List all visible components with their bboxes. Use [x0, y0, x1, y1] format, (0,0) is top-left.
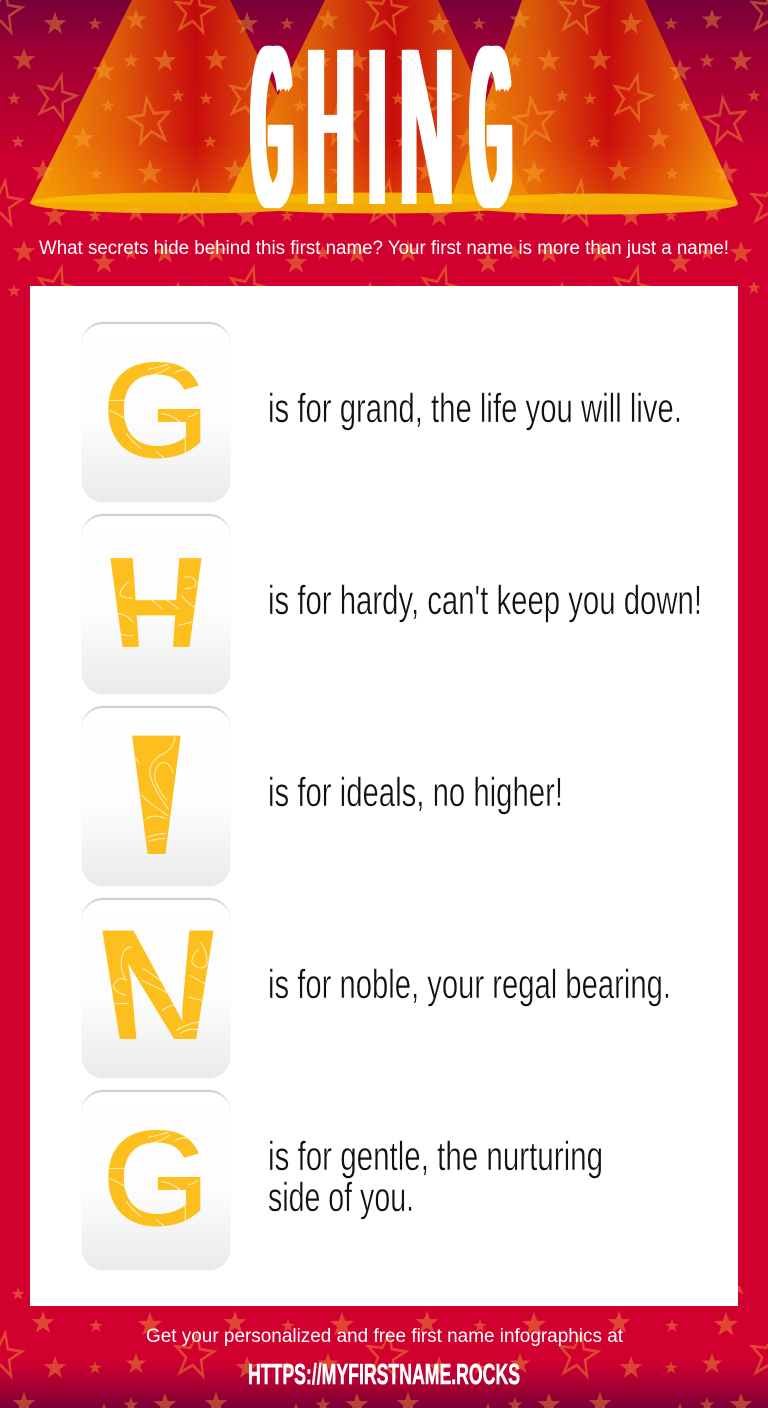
title: [250, 2, 512, 252]
letter I: I: [71, 699, 243, 891]
swirls on G: [110, 1132, 199, 1232]
letter G: G: [103, 337, 209, 485]
letter N: N: [78, 872, 238, 1060]
swirls on N: [108, 942, 208, 1220]
letter tile: I: [82, 706, 230, 886]
letter tile: H: [82, 514, 230, 694]
footer url: HTTPS://MYFIRSTNAME.ROCKS: [248, 1359, 520, 1391]
text: I line: is for ideals, no higher!: [268, 769, 563, 815]
footer text: Get your personalized and free first name infographics at: [146, 1326, 624, 1347]
title: I: [368, 2, 386, 252]
swirls on H: [116, 576, 199, 846]
title: G: [472, 2, 510, 252]
subtitle: What secrets hide behind this first name? Your first name is more than just a name!: [39, 238, 729, 259]
text: second G lines: side of you.: [268, 1174, 414, 1220]
title: H: [308, 2, 354, 252]
letter H: H: [93, 514, 219, 666]
text: second G lines: [268, 1133, 603, 1220]
letter tile: G: [82, 1090, 230, 1270]
panel: letter meanings: [30, 286, 738, 1306]
title: G: [252, 2, 291, 252]
text: second G lines: is for gentle, the nurturing: [268, 1133, 603, 1179]
swirls on G: [110, 364, 199, 464]
title: N: [400, 2, 454, 252]
letter G: G: [103, 1105, 209, 1253]
letter tile: N: [82, 898, 230, 1078]
letter tile: G: [82, 322, 230, 502]
swirls on I: [134, 736, 176, 842]
